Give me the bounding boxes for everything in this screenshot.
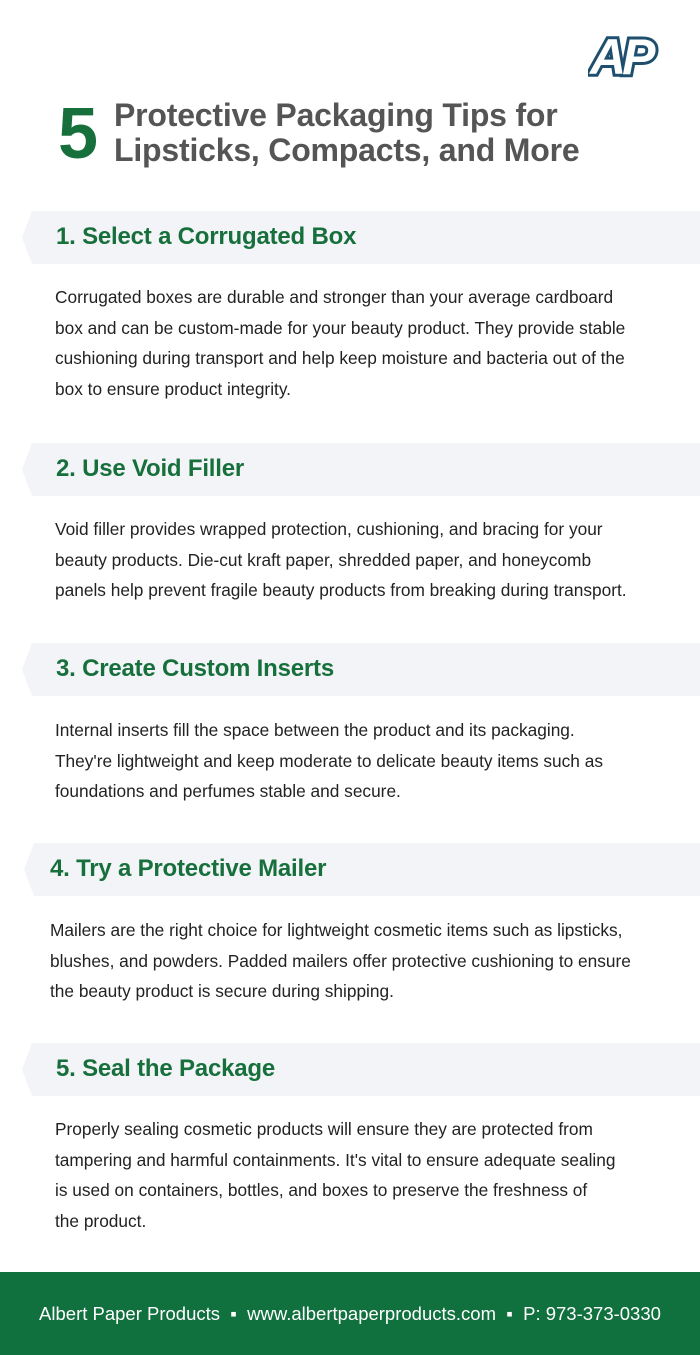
title number 5: 5 xyxy=(58,94,98,174)
section 3 text: They're lightweight and keep moderate to delicate beauty items such as xyxy=(55,750,603,770)
section 5 text: tampering and harmful containments. It's vital to ensure adequate sealing xyxy=(55,1150,615,1170)
footer xyxy=(0,1272,700,1355)
section 2 text: beauty products. Die-cut kraft paper, shredded paper, and honeycomb xyxy=(55,550,591,570)
section 5 heading band: 5. Seal the Package xyxy=(56,1055,275,1082)
title xyxy=(58,94,579,174)
section 1 text xyxy=(55,287,625,398)
section 3 heading band: 3. Create Custom Inserts xyxy=(56,655,334,682)
section 1 text: Corrugated boxes are durable and stronger than your average cardboard xyxy=(55,287,613,307)
section 4 text: Mailers are the right choice for lightweight cosmetic items such as lipsticks, xyxy=(50,920,622,940)
section 4 heading band xyxy=(24,843,700,896)
section 4 text: blushes, and powders. Padded mailers offer protective cushioning to ensure xyxy=(50,950,631,970)
section 3 heading band xyxy=(22,643,700,696)
section 5 text: the product. xyxy=(55,1210,146,1230)
section 1 text: box and can be custom-made for your beauty product. They provide stable xyxy=(55,318,625,338)
footer: Albert Paper Products ▪ www.albertpaperproducts.com ▪ P: 973-373-0330 xyxy=(39,1303,661,1324)
section 3 text: Internal inserts fill the space between the product and its packaging. xyxy=(55,720,575,740)
section 3 text: foundations and perfumes stable and secure. xyxy=(55,781,401,801)
section 5 heading band xyxy=(22,1043,700,1096)
section 1 text: cushioning during transport and help keep moisture and bacteria out of the xyxy=(55,348,625,368)
section 2 heading band xyxy=(22,443,700,496)
section 2 heading band: 2. Use Void Filler xyxy=(56,455,244,482)
title text: Lipsticks, Compacts, and More xyxy=(114,132,579,168)
title text: Protective Packaging Tips for xyxy=(114,97,558,133)
section 4 heading band: 4. Try a Protective Mailer xyxy=(50,855,326,882)
section 1 text: box to ensure product integrity. xyxy=(55,378,291,398)
section 2 text: panels help prevent fragile beauty products from breaking during transport. xyxy=(55,580,627,600)
section 5 text: is used on containers, bottles, and boxes to preserve the freshness of xyxy=(55,1180,587,1200)
section 4 text xyxy=(50,920,631,1001)
section 1 heading band xyxy=(22,211,700,264)
section 5 text: Properly sealing cosmetic products will ensure they are protected from xyxy=(55,1119,593,1139)
section 3 text xyxy=(55,720,603,801)
title text xyxy=(114,97,579,168)
section 4 text: the beauty product is secure during shipping. xyxy=(50,981,394,1001)
section 5 text xyxy=(55,1119,615,1230)
section 1 heading band: 1. Select a Corrugated Box xyxy=(56,223,356,250)
section 2 text xyxy=(55,519,627,600)
section 2 text: Void filler provides wrapped protection, cushioning, and bracing for your xyxy=(55,519,603,539)
